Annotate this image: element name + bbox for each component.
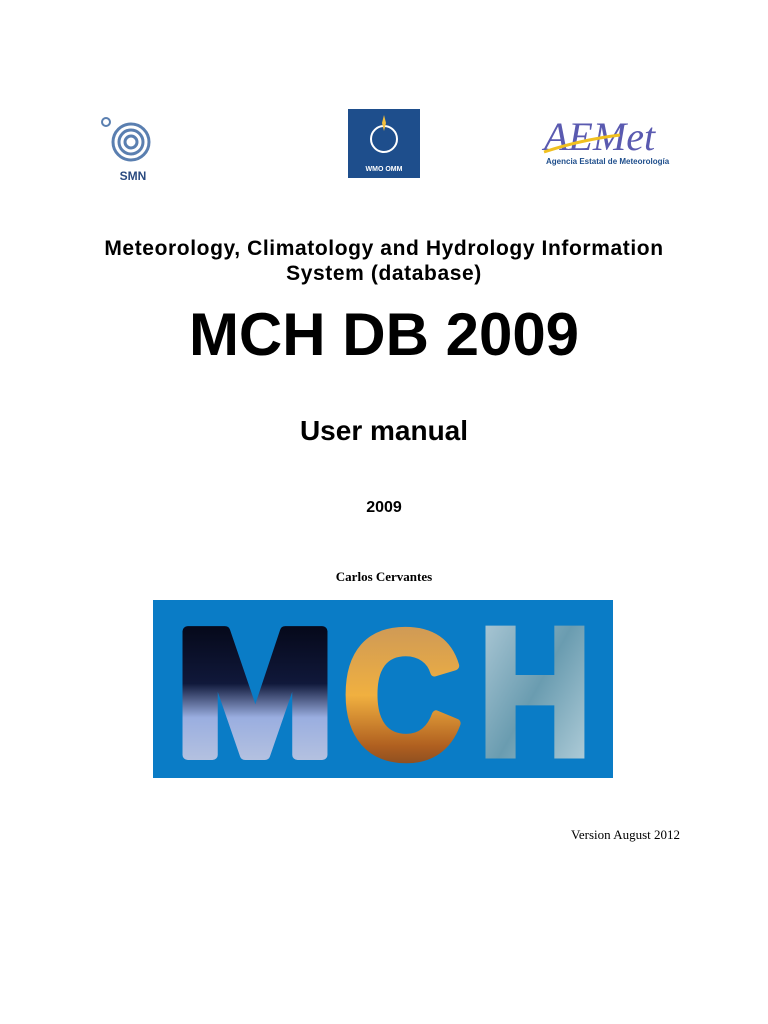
logo: WMO OMM [348, 109, 420, 178]
version note: Version August 2012 [571, 827, 680, 842]
logo: WMO OMM: WMO OMM [366, 166, 403, 173]
banner: MCH logo [153, 600, 613, 778]
logo: SMN [101, 117, 150, 183]
title: MCH DB 2009 [189, 301, 579, 368]
year: 2009 [366, 499, 402, 516]
logo: AEMet: AEMet [541, 114, 656, 159]
author: Carlos Cervantes [336, 569, 432, 584]
logo: SMN: SMN [120, 169, 146, 183]
subtitle: Meteorology, Climatology and Hydrology Information [104, 237, 664, 260]
logo: AEMet: Agencia Estatal de Meteorología [546, 157, 670, 166]
heading: user manual: User manual [300, 415, 468, 446]
subtitle [104, 237, 664, 285]
subtitle: System (database) [286, 262, 482, 285]
